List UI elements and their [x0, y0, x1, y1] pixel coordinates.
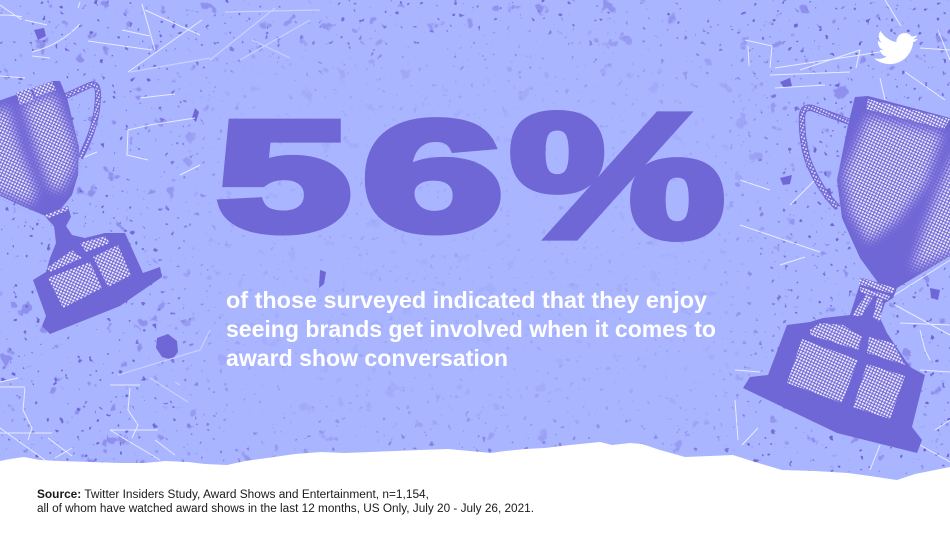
trophy: right [743, 90, 950, 470]
source line 1: Source: Twitter Insiders Study, Award Shows and Entertainment, n=1,154, [37, 489, 429, 501]
right trophy cup [837, 96, 950, 288]
background: ink blotches [34, 28, 940, 360]
left trophy collar [46, 208, 68, 217]
percent sign: % [509, 77, 726, 275]
source line 2: all of whom have watched award shows in the last 12 months, US Only, July 20 - July 26, 2021. [37, 503, 534, 515]
right trophy handle [802, 108, 850, 208]
source note [37, 489, 534, 515]
body text [226, 287, 716, 371]
background: white scratches [0, 2, 202, 460]
right trophy collar and stem [852, 278, 895, 322]
torn paper footer [0, 442, 950, 535]
left trophy stem and base [33, 206, 162, 334]
left trophy cup [0, 81, 79, 217]
digit 5: 5 [216, 90, 351, 264]
right trophy base [743, 278, 925, 453]
line 3: award show conversation [226, 345, 508, 371]
line 2: seeing brands get involved when it comes to [226, 316, 716, 342]
left trophy halftone highlights [0, 81, 131, 308]
digit 6: 6 [362, 89, 503, 263]
right trophy base panels [787, 323, 905, 419]
icon: twitter bird [873, 29, 918, 68]
trophy: left [0, 81, 162, 334]
left trophy handle [66, 84, 98, 158]
statistic: 56% [216, 77, 726, 275]
background: faint scratches [118, 8, 320, 402]
right trophy halftone highlights [838, 99, 950, 274]
line 1: of those surveyed indicated that they enjoy [226, 287, 707, 313]
